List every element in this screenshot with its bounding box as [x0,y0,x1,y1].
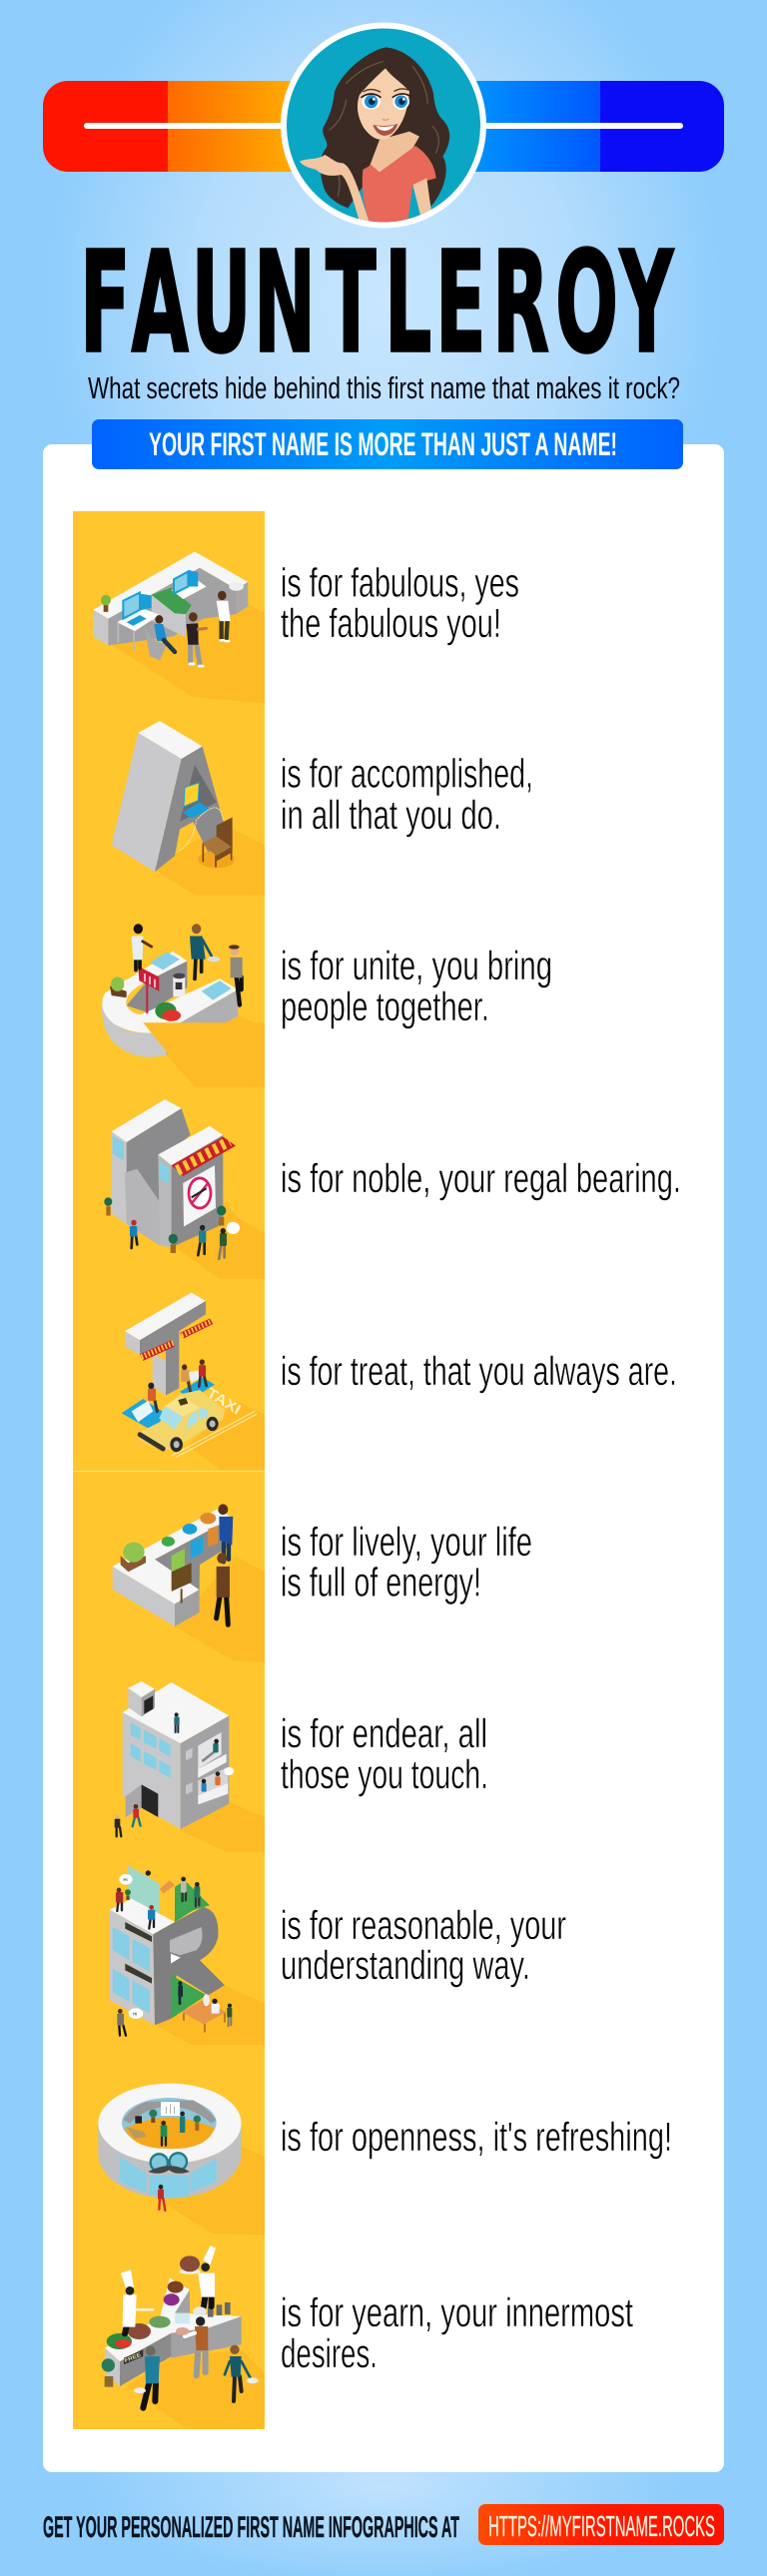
illustration column contents [73,551,265,2429]
icon: letter E building [115,1681,265,1852]
row text: E: is for endear, all [281,1710,487,1756]
row text: E [281,1710,488,1797]
icon: letter F office [93,551,265,703]
icon: letter T taxi stand [122,1293,265,1469]
row text: L: is for lively, your life [281,1519,532,1565]
row text: A: is for accomplished, [281,751,533,797]
decorative seam [73,1471,265,1472]
icon: letter U kiosk [102,924,252,1075]
icon: letter L recycling station [113,1504,265,1662]
row text: R [281,1902,566,1988]
row text: A [281,751,533,838]
icon: letter R office: Hi [123,1877,128,1882]
row text: F: the fabulous you! [281,600,501,646]
icon: letter T taxi stand: TAXI [205,1384,244,1418]
footer url button [478,2504,724,2545]
row text: F: is for fabulous, yes [281,560,519,606]
row text: U [281,943,552,1029]
white content panel [43,444,724,2472]
row text: F [281,560,519,646]
row text: U: people together. [281,983,489,1029]
icon: letter O optician [98,2084,265,2235]
row text: E: those you touch. [281,1751,488,1797]
row text: U: is for unite, you bring [281,943,552,988]
row text: A: in all that you do. [281,792,501,838]
icon: letter Y buffet [102,2246,265,2429]
icon: letter A workstation [112,721,265,895]
row text: Y: desires. [281,2330,378,2376]
row text: R: is for reasonable, your [281,1902,566,1948]
row text: Y: is for yearn, your innermost [281,2289,633,2335]
row text: Y [281,2289,633,2376]
banner [92,419,683,469]
row text: R: understanding way. [281,1942,530,1988]
portrait medallion: smiling woman with long brown hair [281,22,486,228]
icon: letter R office [110,1865,265,2045]
icon: letter Y buffet: FREE [124,2352,142,2364]
header ribbon bar [43,81,724,172]
yellow illustration column [73,511,265,2429]
row text: L: is full of energy! [281,1560,481,1606]
title: FAUNTLEROY: FAUNTLEROY [80,223,674,384]
icon: letter N storefront [104,1022,265,1279]
icon: letter R office: Hi [133,2011,137,2016]
row text: L [281,1519,532,1606]
